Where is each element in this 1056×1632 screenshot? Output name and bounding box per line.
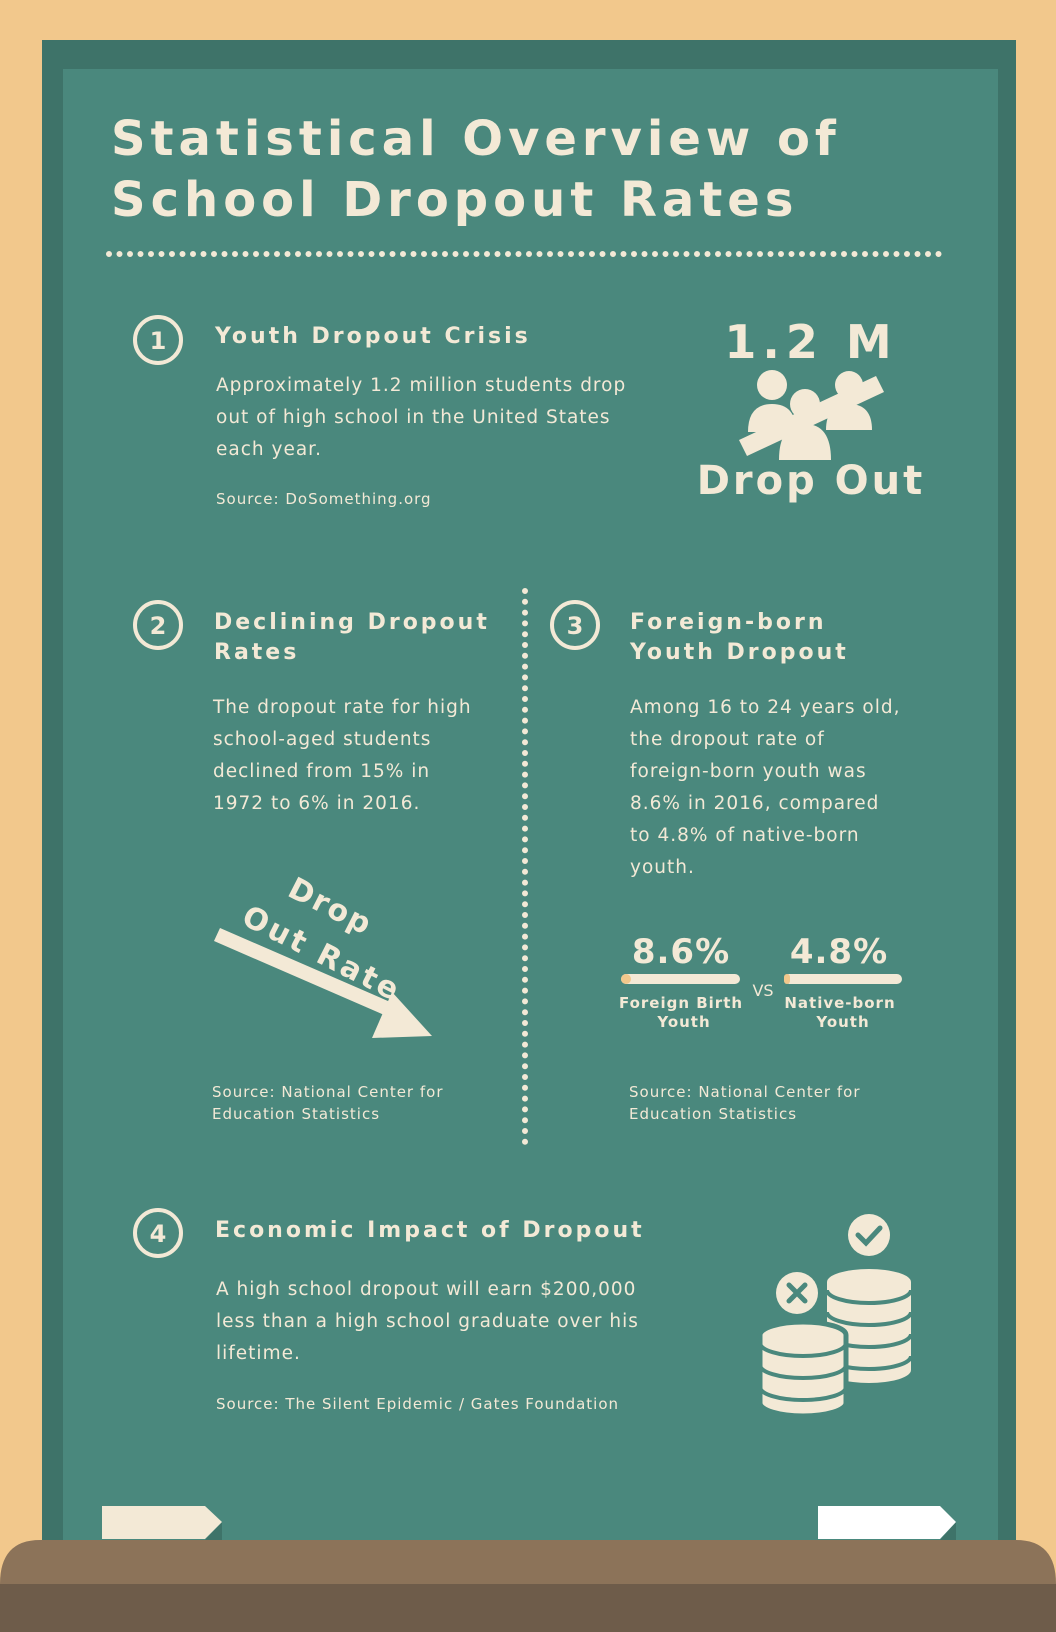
source 3: Source: National Center for	[629, 1083, 860, 1101]
body 3: the dropout rate of	[630, 729, 825, 750]
source 2: Education Statistics	[212, 1105, 380, 1123]
number badge 4	[135, 1210, 181, 1256]
comparison chart: 8.6%	[632, 932, 730, 972]
right stack	[827, 1269, 911, 1383]
number badge 1: 1	[150, 327, 166, 355]
title: School Dropout Rates	[111, 172, 798, 228]
source 4: Source: The Silent Epidemic / Gates Foundation	[216, 1395, 619, 1413]
body 2: 1972 to 6% in 2016.	[213, 793, 420, 814]
title: Statistical Overview of	[111, 111, 841, 167]
source 2	[212, 1083, 444, 1123]
number badge 1	[135, 317, 181, 363]
body 1: Approximately 1.2 million students drop	[216, 375, 626, 396]
body 4: A high school dropout will earn $200,000	[216, 1279, 636, 1300]
stat: 1.2 M drop out	[697, 315, 925, 504]
title	[111, 111, 841, 228]
comparison chart: 4.8%	[790, 932, 888, 972]
number badge 4: 4	[150, 1220, 166, 1248]
section 4: economic impact	[135, 1210, 645, 1413]
heading 3: Foreign-born	[630, 610, 826, 635]
source 2: Source: National Center for	[212, 1083, 444, 1101]
comparison chart: VS	[752, 981, 774, 1000]
heading 1: Youth Dropout Crisis	[214, 324, 531, 349]
number badge 3	[552, 602, 598, 648]
body 3: to 4.8% of native-born	[630, 825, 860, 846]
heading 2	[214, 610, 490, 665]
source 3: Education Statistics	[629, 1105, 797, 1123]
body 3: 8.6% in 2016, compared	[630, 793, 879, 814]
section 1: youth dropout crisis	[135, 317, 626, 508]
comparison chart: Youth	[815, 1013, 870, 1031]
icon: check	[848, 1214, 890, 1256]
comparison chart	[619, 932, 902, 1031]
comparison chart: Foreign Birth	[619, 994, 743, 1012]
body 4: less than a high school graduate over his	[216, 1311, 639, 1332]
heading 3: Youth Dropout	[629, 640, 849, 665]
arrow: drop out rate	[214, 871, 432, 1038]
icon: crossed-out people	[739, 370, 884, 460]
body 3: youth.	[630, 857, 695, 878]
source 1: Source: DoSomething.org	[216, 490, 432, 508]
body 3: Among 16 to 24 years old,	[630, 697, 901, 718]
body 2	[212, 697, 472, 814]
body 2: The dropout rate for high	[212, 697, 472, 718]
body 2: declined from 15% in	[213, 761, 430, 782]
icon: coin stacks	[760, 1214, 911, 1416]
stat: 1.2 M drop out: Drop Out	[697, 458, 925, 504]
body 2: school-aged students	[213, 729, 431, 750]
body 1	[216, 375, 626, 460]
section 2: declining dropout rates	[135, 602, 490, 1123]
body 3: foreign-born youth was	[630, 761, 867, 782]
number badge 2	[135, 602, 181, 648]
icon: x mark	[776, 1272, 818, 1314]
heading 3	[629, 610, 849, 665]
section 3: foreign-born youth	[552, 602, 902, 1123]
body 3	[630, 697, 901, 878]
arrow: drop out rate: Drop	[282, 871, 378, 943]
arrow: drop out rate: Out Rate	[236, 899, 407, 1009]
body 4: lifetime.	[216, 1343, 301, 1364]
number badge 3: 3	[567, 612, 583, 640]
comparison chart: Native-born	[784, 994, 896, 1012]
body 1: each year.	[216, 439, 322, 460]
source 3	[629, 1083, 860, 1123]
heading 4: Economic Impact of Dropout	[215, 1218, 645, 1243]
chalk pieces	[102, 1506, 956, 1540]
heading 2: Rates	[214, 640, 299, 665]
body 1: out of high school in the United States	[216, 407, 611, 428]
left stack	[760, 1322, 846, 1416]
stat: 1.2 M drop out: 1.2 M	[724, 315, 898, 369]
heading 2: Declining Dropout	[214, 610, 490, 635]
body 4	[216, 1279, 639, 1364]
chalk tray	[0, 1540, 1056, 1632]
number badge 2: 2	[150, 612, 166, 640]
comparison chart: Youth	[656, 1013, 711, 1031]
